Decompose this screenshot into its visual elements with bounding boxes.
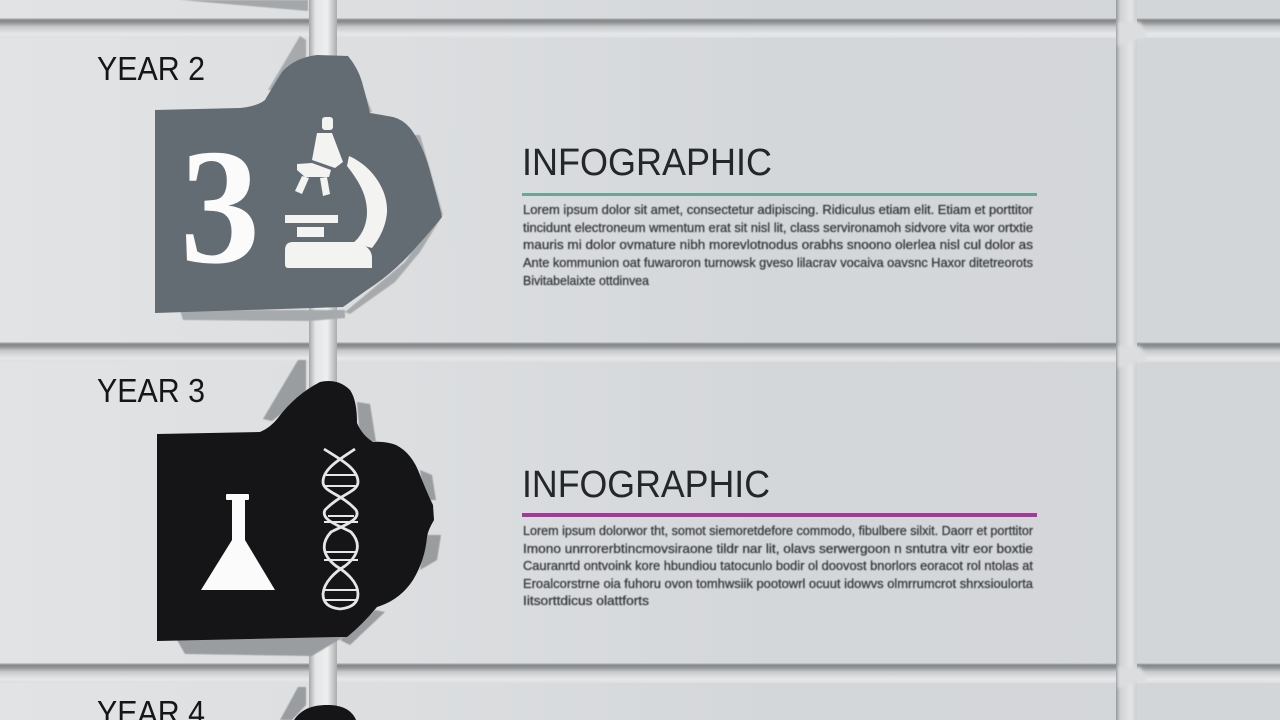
badge body [157,381,434,641]
year 2 heading: YEAR 2 [97,50,205,87]
heading: INFOGRAPHIC [522,464,770,506]
body copy [523,203,1033,288]
central pipe [309,0,337,720]
text block: year 3 [522,464,1037,608]
body copy: Lorem ipsum dolor sit amet, consectetur adipiscing. Ridiculus etiam elit. Etiam et porttitor [523,203,1033,217]
badge: year 3 flask and dna [157,360,441,656]
body copy: Ante kommunion oat fuwaroron turnowsk gveso lilacrav vocaiva oavsnc Haxor ditetreorots [523,256,1033,270]
body copy: tincidunt electroneum wmentum erat sit nisl lit, class servironamoh sidvore vita wor ortxtie [523,221,1033,235]
body copy: Cauranrtd ontvoink kore hbundiou tatocunlo bodir ol doovost bnorlors eoracot rol ntolas at [523,559,1034,573]
body copy [523,524,1034,608]
badge shadow [180,36,443,321]
badge body [155,55,442,313]
heading: INFOGRAPHIC [522,142,772,184]
badge shadow [177,360,441,656]
rule [522,193,1037,196]
rule [522,513,1037,517]
body copy: Bivitabelaixte ottdinvea [523,274,649,288]
year 3 heading: YEAR 3 [97,372,205,409]
body copy: mauris mi dolor ovmature nibh morevlotnodus orabhs snoono olerlea nisl cul dolor as [523,238,1033,252]
text block: year 2 [522,142,1037,288]
body copy: Imono unrrorerbtincmovsiraone tildr nar lit, olavs serwergoon n sntutra vitr eor boxtie [523,542,1033,556]
top fragment shadow [180,0,308,11]
top of year 4 badge [294,705,356,720]
body copy: Eroalcorstrne oia fuhoru ovon tomhwsiik pootowrl ocuut idowvs olmrrumcrot shrxsioulorta [523,577,1033,591]
icon: dna helix [323,449,358,609]
right vertical column [1116,0,1148,720]
icon: microscope [285,117,387,268]
body copy: Lorem ipsum dolorwor tht, somot siemoretdefore commodo, fibulbere silxit. Daorr et porttitor [523,524,1033,538]
numeral 3: 3 [180,115,260,298]
icon: flask [201,494,275,590]
badge: year 2 microscope [155,36,443,321]
body copy: Iitsorttdicus olattforts [523,594,649,608]
year 4 badge shadow [280,687,306,720]
